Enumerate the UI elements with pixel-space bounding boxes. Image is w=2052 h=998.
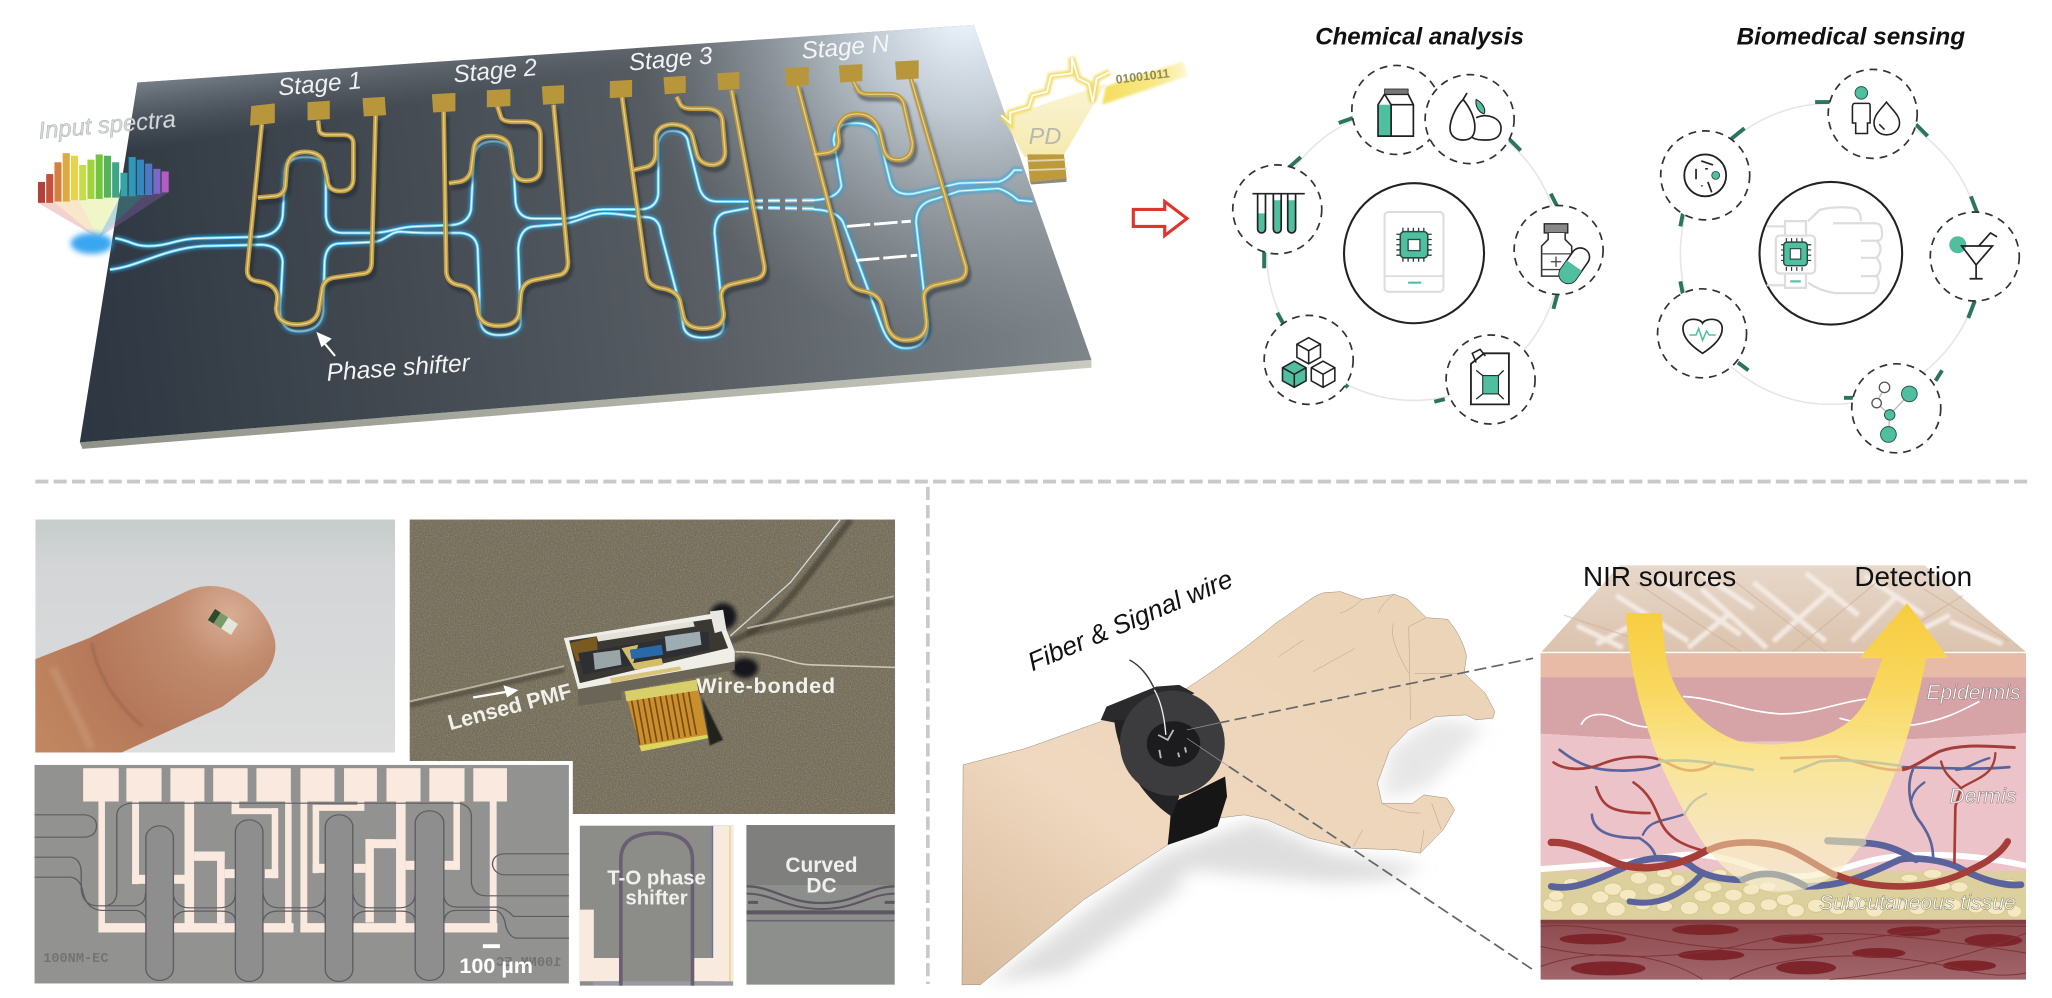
label: curved DC: DC — [806, 875, 837, 898]
input light glow — [71, 233, 113, 254]
icon: fruit — [1425, 75, 1514, 164]
muscle layer — [1541, 920, 2026, 980]
icon: cubes — [1264, 315, 1353, 404]
label: epidermis: Epidermis — [1926, 682, 2021, 705]
panel: wearable on wrist — [962, 563, 1533, 985]
upper dermis band — [1541, 677, 2026, 742]
package frame — [564, 612, 735, 689]
watch face — [1147, 721, 1200, 767]
panel: chip micrograph — [31, 761, 573, 986]
phase shifter loop — [621, 833, 692, 986]
arm and hand — [962, 592, 1495, 985]
green connector ticks — [1680, 102, 1977, 398]
panel: finger photograph — [34, 520, 395, 754]
package interior — [569, 618, 728, 683]
label: curved DC: Curved — [785, 854, 858, 877]
panel: photonic chip schematic — [37, 25, 1188, 449]
watch body — [1120, 691, 1225, 796]
cast shadow — [988, 820, 1424, 983]
panel: packaged device photograph — [410, 520, 895, 814]
package front face — [578, 661, 735, 706]
label: wire-bonded: Wire-bonded — [696, 673, 836, 698]
hand shadow — [1382, 718, 1485, 800]
label: fiber and signal wire: Fiber & Signal wire — [1023, 563, 1237, 677]
projection lines — [1187, 723, 1217, 730]
divider: vertical — [926, 487, 929, 984]
label: stage N: Stage N — [800, 30, 891, 65]
label: stage 3: Stage 3 — [628, 42, 714, 77]
icon: milk carton — [1352, 65, 1441, 154]
connecting ring — [1267, 107, 1560, 400]
blood vessels — [1551, 746, 2021, 903]
waveguides — [110, 123, 1033, 348]
green connector ticks — [1264, 118, 1557, 402]
muted vessels under light — [1660, 756, 1901, 886]
heading: chemical analysis: Chemical analysis — [1315, 23, 1524, 50]
gold detector block — [1027, 154, 1067, 185]
wristband upper — [1101, 685, 1195, 723]
panel: curved directional coupler micrograph — [746, 825, 895, 985]
metal traces — [580, 826, 733, 986]
flex cable shadow — [697, 682, 724, 746]
fiber shadow — [410, 670, 564, 705]
central device — [1344, 183, 1484, 323]
label: PD: PD — [1029, 123, 1061, 149]
label: mask text: 100NM-EC — [43, 952, 109, 967]
NIR light arrow — [1626, 603, 1949, 892]
skin surface — [1542, 565, 2026, 652]
stage N dashed markers — [847, 221, 917, 260]
hand contour lines — [1279, 594, 1458, 853]
white nerve fibres — [1581, 696, 1979, 727]
connecting ring — [1680, 103, 1981, 404]
label: detection: Detection — [1854, 561, 1972, 592]
dermis — [1541, 733, 2026, 873]
panel: thermo-optic phase shifter micrograph — [580, 826, 733, 986]
arrow: phase shifter pointer — [318, 334, 335, 356]
heading: biomedical sensing: Biomedical sensing — [1737, 23, 1965, 50]
label: subcutaneous tissue: Subcutaneous tissue — [1819, 892, 2016, 915]
panel: biomedical sensing — [1658, 23, 2019, 453]
chip plate — [80, 25, 1091, 449]
panel: chemical analysis — [1233, 23, 1603, 424]
arrow: fiber direction — [473, 687, 516, 698]
label: stage 2: Stage 2 — [452, 54, 539, 88]
icon: chip — [1781, 238, 1811, 271]
icon: chip — [1396, 228, 1432, 262]
phase shifter arms — [146, 811, 444, 981]
divider: horizontal — [35, 480, 2027, 483]
label: dermis: Dermis — [1949, 785, 2017, 808]
icon: test tubes — [1233, 165, 1322, 254]
gold electrodes — [247, 79, 969, 345]
icon: cocktail — [1930, 212, 2019, 301]
finger — [34, 586, 275, 754]
label: T-O phase shifter: T-O phase — [607, 868, 706, 890]
output wires — [730, 520, 895, 667]
waveguide routing — [35, 803, 569, 938]
microchip on fingertip — [208, 609, 238, 635]
lensed fiber — [410, 666, 564, 701]
label: scale value: 100 µm — [459, 953, 533, 978]
input spectra bars — [38, 153, 170, 238]
metal wiring — [83, 768, 507, 932]
icon: person and drop — [1828, 69, 1917, 158]
icon: jerry can — [1446, 335, 1535, 424]
gold contact pads — [250, 60, 919, 126]
scale bar — [483, 944, 500, 948]
fat cells — [1543, 868, 2022, 917]
panel: skin cross section — [1541, 561, 2026, 980]
watch body shade — [1114, 720, 1179, 817]
label: binary output: 01001011 — [1115, 66, 1170, 87]
wristband lower — [1168, 777, 1227, 845]
fiber wire — [1129, 660, 1166, 735]
white boundary — [1541, 855, 2026, 876]
epidermis band — [1541, 653, 2026, 677]
photodetector and output signal — [1001, 58, 1188, 185]
icon: bacteria culture — [1661, 131, 1750, 220]
icon: heart rate — [1658, 289, 1747, 378]
skin layers and tissue — [1541, 603, 2026, 980]
veins — [1551, 750, 2021, 903]
wrist outline — [1767, 207, 1882, 293]
flex cable — [625, 680, 708, 751]
micrograph circuit — [35, 768, 569, 981]
arteries — [1551, 746, 2014, 886]
label: NIR sources: NIR sources — [1583, 561, 1736, 592]
label: mirrored mask text: 100NM-EC — [496, 956, 561, 971]
central wrist device — [1760, 182, 1902, 325]
package and flex cable — [564, 603, 758, 751]
label: input spectra: Input spectra — [37, 106, 177, 145]
subcutaneous tissue — [1541, 871, 2026, 920]
label: phase shifter: Phase shifter — [326, 350, 473, 387]
coupler traces — [746, 886, 895, 921]
icon: medicine bottle and capsule — [1514, 205, 1603, 294]
icon: molecules — [1852, 364, 1941, 453]
drawn hand and watch — [962, 592, 1533, 985]
label: stage 1: Stage 1 — [277, 67, 363, 102]
label: T-O phase shifter: shifter — [625, 887, 688, 909]
label: lensed PMF: Lensed PMF — [445, 678, 574, 735]
arrow: red arrow to applications — [1133, 202, 1187, 236]
